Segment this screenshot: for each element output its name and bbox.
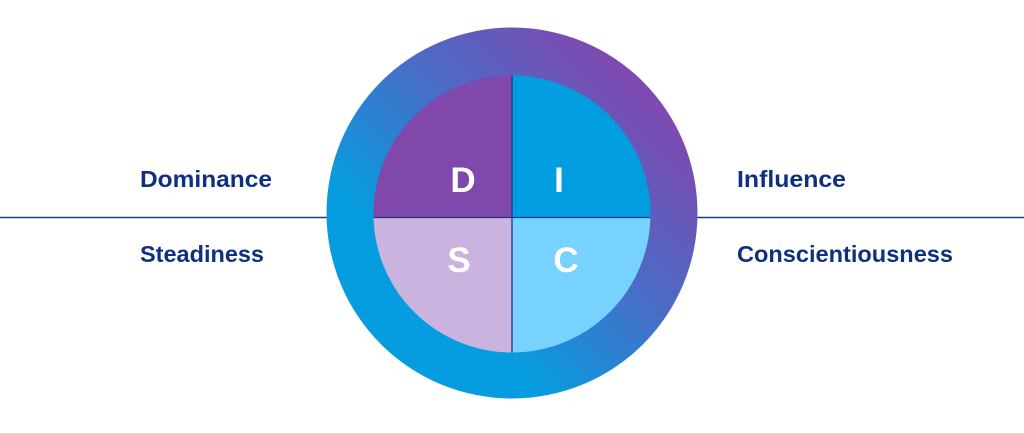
letters: S (447, 241, 471, 280)
quadrant S (370, 218, 512, 358)
labels: Dominance (140, 166, 272, 192)
labels (140, 166, 953, 267)
labels: Influence (737, 166, 846, 192)
disc quadrants (370, 70, 654, 360)
labels: Conscientiousness (737, 241, 953, 267)
quadrant D (370, 70, 512, 218)
letters (447, 161, 579, 280)
letters: C (553, 241, 579, 280)
letters: I (554, 161, 564, 200)
quadrant C (512, 218, 654, 358)
quadrant I (512, 70, 654, 218)
outer ring (326, 28, 698, 398)
labels: Steadiness (140, 241, 264, 267)
letters: D (450, 161, 476, 200)
